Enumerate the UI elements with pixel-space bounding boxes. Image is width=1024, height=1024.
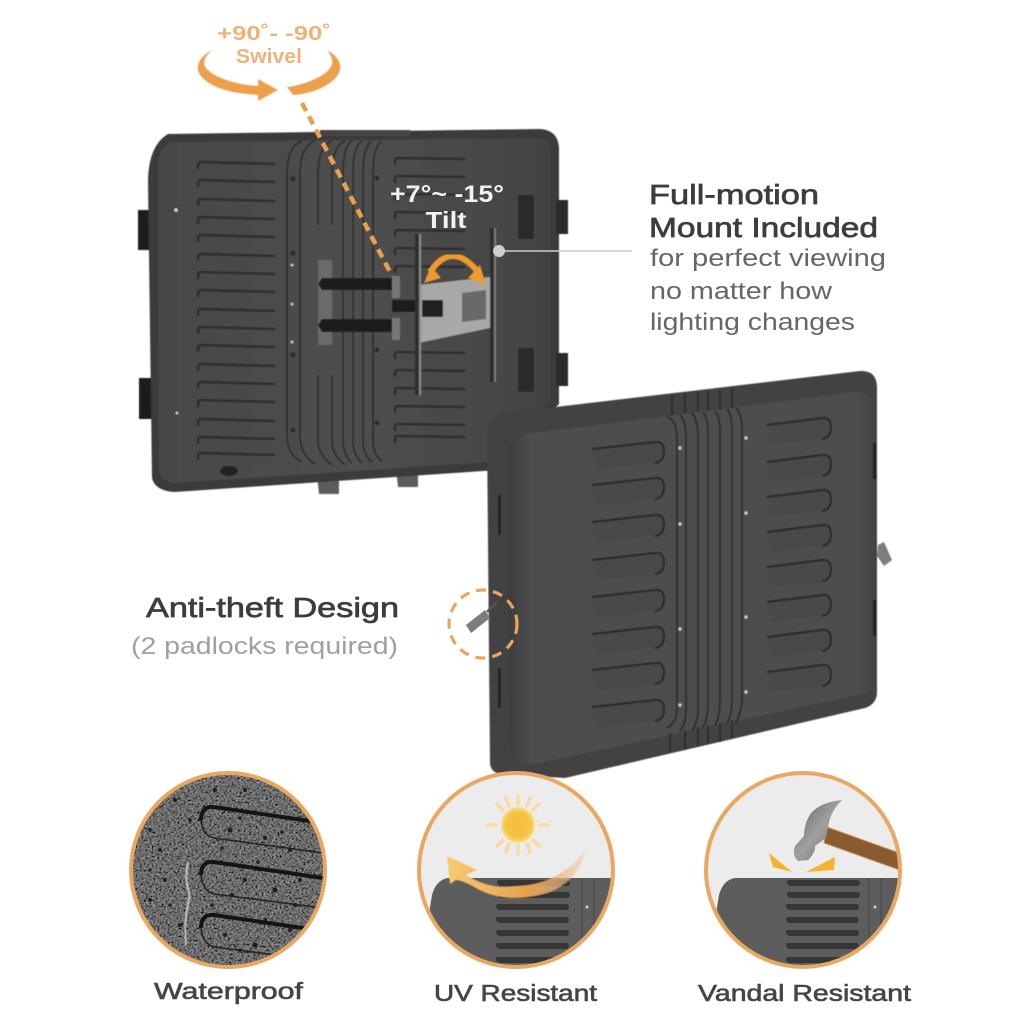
right vent slots [395,158,465,443]
icon: sun [488,796,548,854]
swivel label: +90˚- -90˚ [217,22,331,45]
lock hole [220,466,238,476]
feature: UV resistant: UV Resistant [434,980,598,1006]
centre ribs [287,141,382,465]
text block: full-motion mount: Full-motion [649,179,819,210]
silver bracket [418,277,490,343]
text block: anti-theft: Anti-theft Design [146,592,399,623]
feature: waterproof [130,772,330,1004]
panel: open enclosure back with mount [138,129,568,494]
right padlock [877,542,892,566]
arrow: tilt [424,256,486,285]
left vent slots [198,162,275,460]
bottom hinge tabs [317,468,418,494]
feature: vandal resistant [698,772,912,1006]
swivel label: Swivel [236,46,302,68]
edge slots [498,443,876,708]
wall plate [318,260,332,345]
text block: anti-theft: (2 padlocks required) [131,633,398,660]
rivets and holes [290,176,380,432]
text block: full-motion mount: Mount Included [649,212,878,243]
enclosure outer shell [148,129,559,492]
callout leader [493,245,632,257]
rivets [678,436,748,707]
dashed swivel line [302,103,390,272]
raised face [508,392,873,764]
tilt label: Tilt [426,207,467,233]
icon: padlock callout [449,590,517,658]
enclosure inner tray [158,138,551,483]
swing arms [318,276,418,340]
right handles [518,195,568,392]
panel: closed enclosure front [487,371,892,778]
icon: hammer head [794,800,842,861]
arrow: swivel [198,50,340,101]
feature: vandal resistant: Vandal Resistant [698,980,912,1006]
text block: full-motion mount: lighting changes [650,309,855,336]
feature: waterproof: Waterproof [154,978,304,1004]
tilt label [390,181,504,233]
text block: full-motion mount [649,179,886,336]
left slot column [592,442,664,728]
shell [487,371,877,778]
ribs [667,388,742,752]
icon: hammer handle [824,826,898,870]
top seam [320,130,410,136]
swivel label [217,22,331,68]
icon: impact chips [769,853,835,872]
feature: UV resistant [418,772,618,1006]
text block: full-motion mount: for perfect viewing [650,245,886,272]
tilt label: +7°~ -15° [390,181,504,208]
right slot column [767,418,831,692]
mounting rails [415,228,496,395]
arrow: UV deflection [447,850,585,898]
text block: full-motion mount: no matter how [650,278,833,305]
text block: anti-theft [131,592,399,660]
left latches [138,210,165,419]
